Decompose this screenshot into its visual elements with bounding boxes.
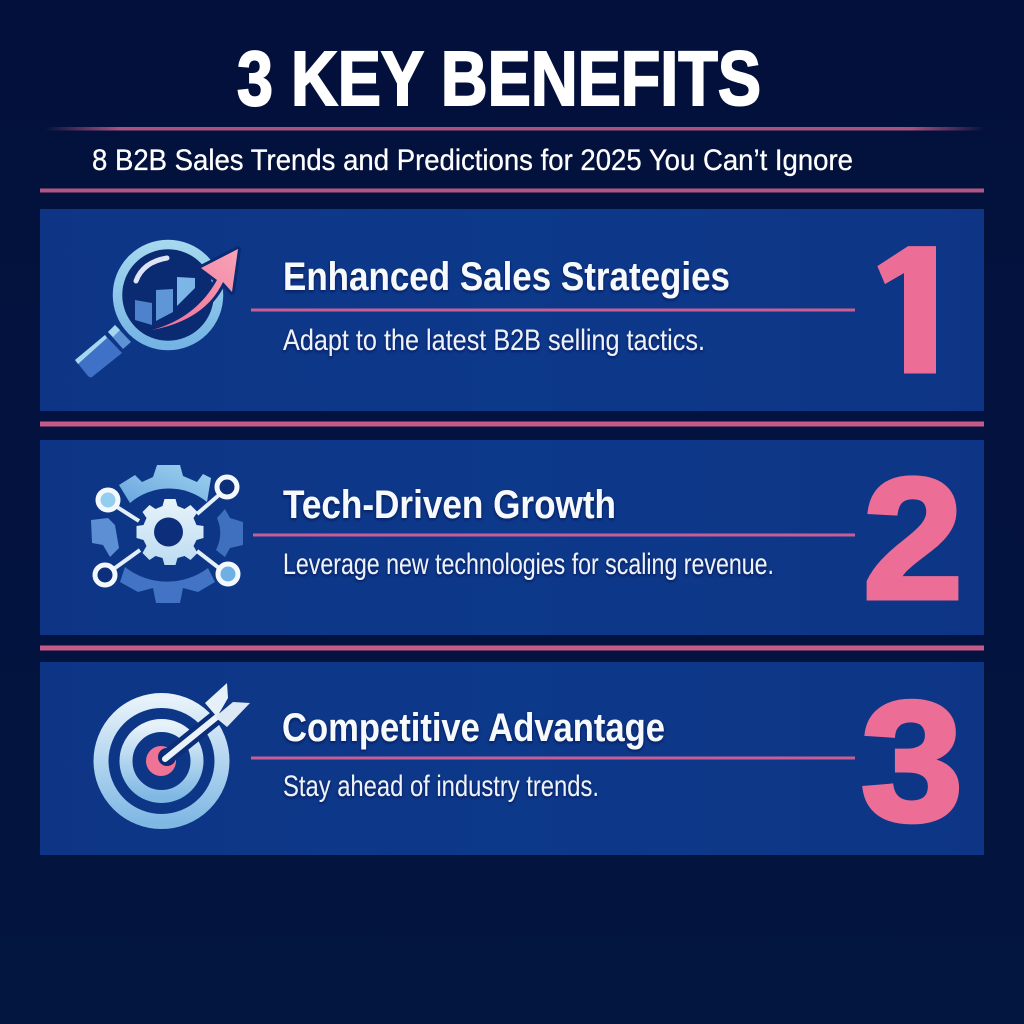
icon: target with arrow	[101, 683, 250, 822]
heading: Tech-Driven Growth	[283, 483, 616, 527]
divider	[40, 422, 984, 426]
number 1: 1	[868, 214, 964, 406]
panel: benefit 1	[40, 209, 984, 411]
panel: benefit 2	[40, 440, 984, 635]
divider	[40, 646, 984, 650]
number 2: 2	[863, 443, 963, 635]
header divider bottom	[40, 188, 984, 192]
icon: magnifying glass with chart and arrow	[75, 244, 238, 377]
rule	[251, 756, 855, 760]
heading: Enhanced Sales Strategies	[283, 255, 730, 299]
panel: benefit 3	[40, 662, 984, 857]
description: Adapt to the latest B2B selling tactics.	[283, 324, 705, 357]
number 3: 3	[861, 667, 963, 857]
description: Leverage new technologies for scaling revenue.	[283, 548, 774, 581]
description: Stay ahead of industry trends.	[283, 770, 599, 803]
rule	[251, 308, 855, 312]
subtitle: 8 B2B Sales Trends and Predictions for 2025 You Can’t Ignore	[92, 144, 853, 177]
icon: gear network	[91, 465, 243, 603]
heading: Competitive Advantage	[282, 706, 665, 750]
title: 3 KEY BENEFITS	[237, 36, 761, 122]
rule	[253, 534, 855, 536]
header divider top	[45, 127, 985, 130]
